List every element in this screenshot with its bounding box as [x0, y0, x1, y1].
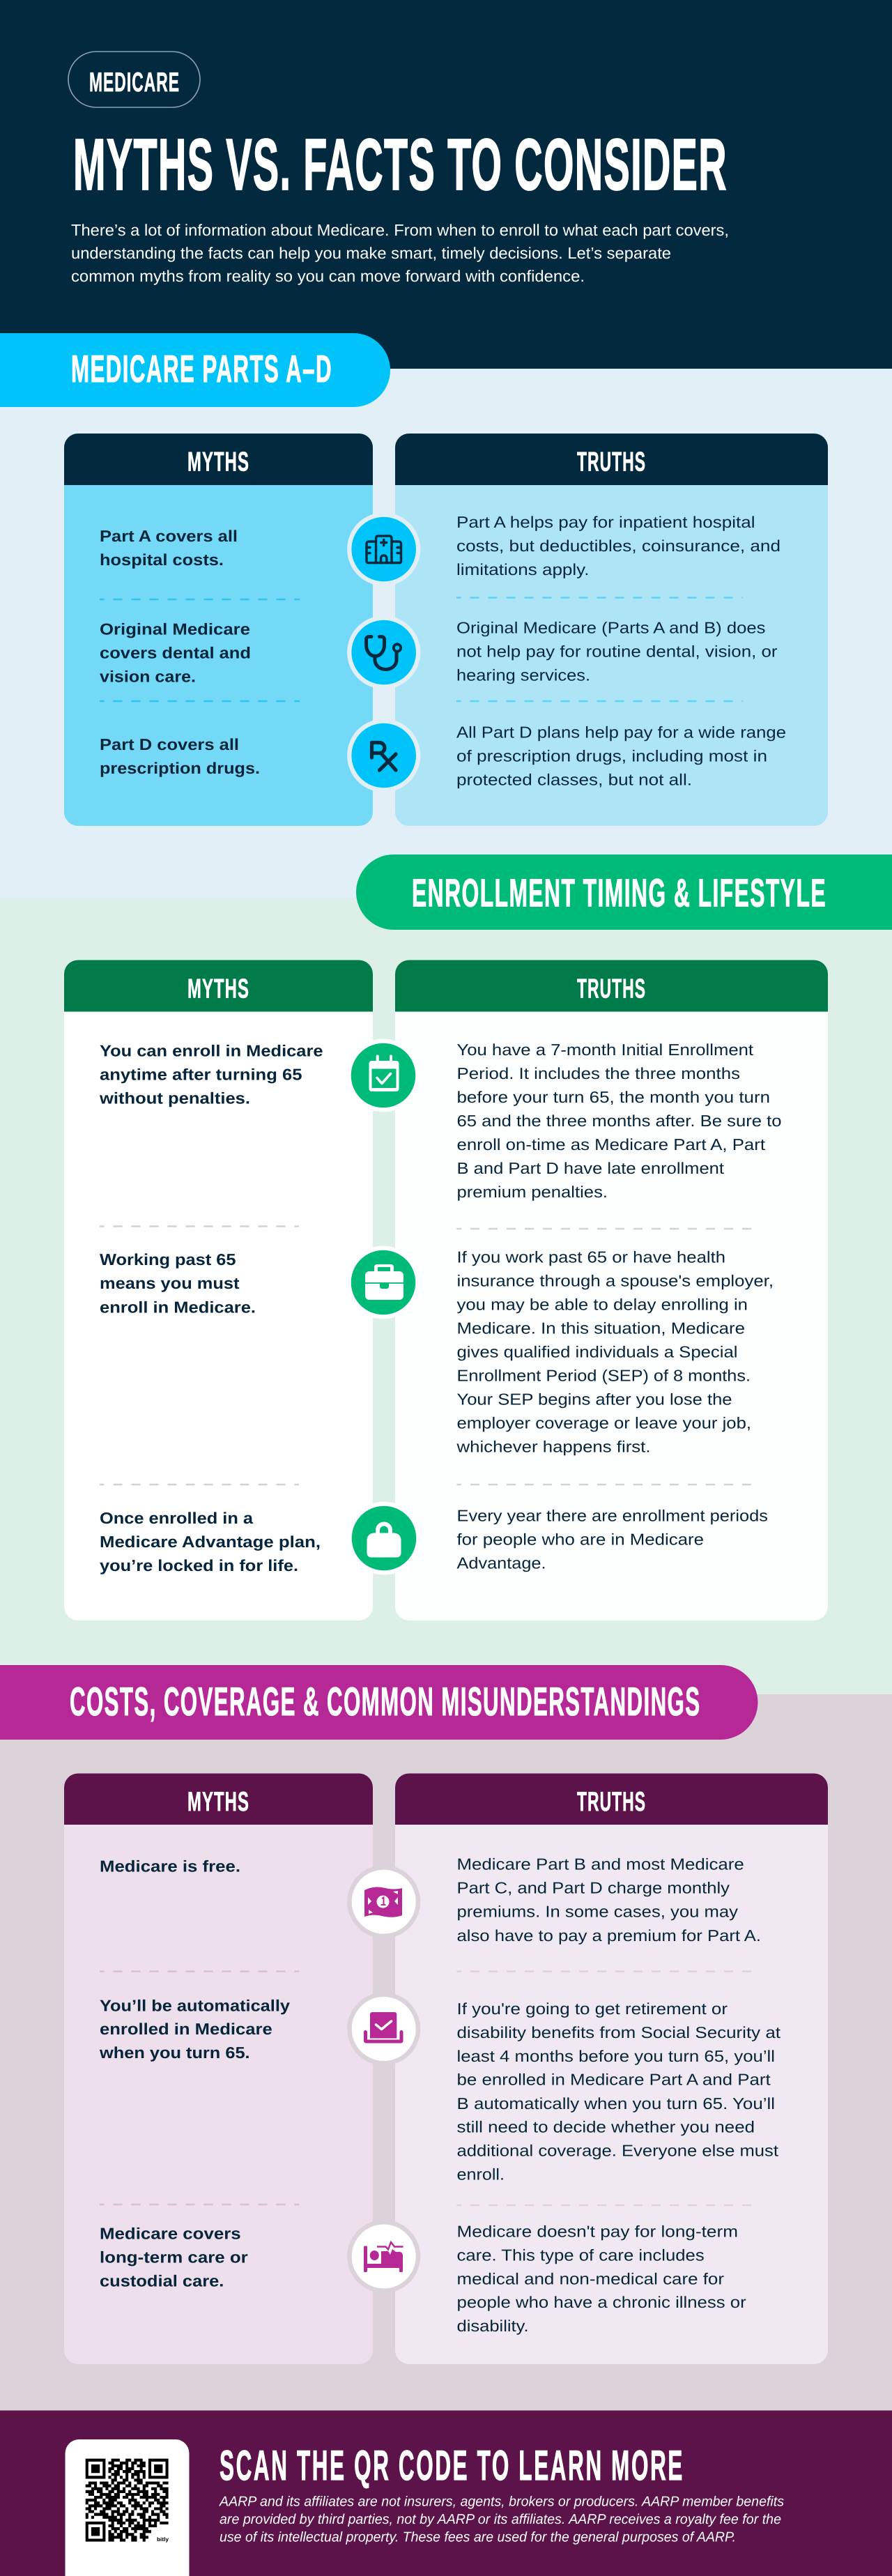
disclaimer text: AARP and its affiliates are not insurers, agents, brokers or producers. AARP member benefits [219, 2494, 784, 2509]
truth text: initial enrollment period [457, 1041, 782, 1201]
truth text: initial enrollment period: B and Part D have late enrollment [457, 1159, 725, 1177]
truths header: TRUTHS [577, 974, 646, 1004]
gutter: green divider [373, 1012, 395, 1620]
myths card: Enrollment [64, 960, 373, 1620]
truth text: Part D: All Part D plans help pay for a wide range [456, 723, 786, 742]
intro text [71, 221, 729, 285]
section tab: Costs, Coverage and Common Misunderstandings [0, 1665, 758, 1740]
truth text: initial enrollment period: 65 and the three months after. Be sure to [457, 1112, 782, 1130]
myth text: locked in [100, 1509, 321, 1574]
truth text: enrollment periods: Advantage. [457, 1554, 546, 1572]
myth text: working past 65 [100, 1250, 256, 1316]
QR code [86, 2460, 169, 2540]
truths card: Costs [395, 1773, 828, 2364]
truth text: initial enrollment period: Period. It includes the three months [457, 1064, 740, 1082]
myth text: working past 65: means you must [100, 1274, 240, 1292]
myths header [64, 960, 373, 1012]
intro text: There’s a lot of information about Medicare. From when to enroll to what each part covers, [71, 221, 729, 239]
header background [0, 0, 892, 369]
truth text: special enrollment period: Your SEP begins after you lose the [457, 1390, 732, 1408]
truth text: premiums [457, 1855, 761, 1945]
icon: hospital [347, 512, 420, 586]
myths header: MYTHS [187, 974, 249, 1004]
truth text: Part A: limitations apply. [456, 560, 590, 578]
panel: section 2 background [0, 898, 892, 1694]
truth text: automatic enrollment: disability benefits from Social Security at [457, 2023, 781, 2041]
truth text: special enrollment period: If you work past 65 or have health [457, 1248, 725, 1266]
truth text: special enrollment period [456, 1248, 774, 1455]
myth text: long-term care: Medicare covers [100, 2225, 241, 2243]
myth text: automatically enrolled: enrolled in Medicare [100, 2020, 272, 2038]
truths header [395, 1773, 828, 1825]
disclaimer text [219, 2494, 784, 2545]
truth text: premiums: Part C, and Part D charge monthly [457, 1879, 730, 1897]
myth text: Original Medicare: Original Medicare [100, 620, 250, 638]
disclaimer text: are provided by third parties, not by AARP or its affiliates. AARP receives a royalty fee for the [220, 2512, 781, 2527]
truths card: Medicare Parts [395, 434, 828, 826]
myth text: Original Medicare: covers dental and [100, 644, 251, 662]
myth text: automatically enrolled: You’ll be automatically [100, 1996, 290, 2014]
truth text: long-term care [457, 2222, 746, 2335]
myth text: Part D [100, 735, 260, 777]
truth text: automatic enrollment: be enrolled in Medicare Part A and Part [457, 2070, 771, 2088]
myth text: enroll anytime: You can enroll in Medicare [100, 1041, 323, 1059]
truth text: long-term care: people who have a chronic illness or [457, 2293, 746, 2311]
myth text: working past 65: Working past 65 [100, 1250, 236, 1268]
truth text: premiums: Medicare Part B and most Medicare [457, 1855, 744, 1873]
truth text: long-term care: Medicare doesn't pay for long-term [457, 2222, 738, 2240]
truth text: special enrollment period: insurance through a spouse's employer, [457, 1271, 774, 1289]
myth text: long-term care [100, 2225, 248, 2290]
truth text: long-term care: care. This type of care includes [457, 2246, 705, 2264]
myth text: automatically enrolled: when you turn 65. [99, 2044, 250, 2062]
truth text: enrollment periods: Every year there are enrollment periods [457, 1507, 768, 1525]
QR code card [66, 2439, 190, 2576]
panel: header [0, 0, 892, 369]
truth text: automatic enrollment: still need to decide whether you need [457, 2117, 755, 2136]
icon: stethoscope [347, 615, 420, 689]
myth text: locked in: you’re locked in for life. [100, 1556, 298, 1574]
disclaimer text: use of its intellectual property. These fees are used for the general purposes of AARP. [220, 2530, 736, 2545]
myths header [64, 1773, 373, 1825]
icon: dollar bill [347, 1865, 420, 1938]
truth text: automatic enrollment [457, 2000, 781, 2183]
myth text: Part D: Part D covers all [100, 735, 239, 753]
truth text: premiums: also have to pay a premium for Part A. [457, 1926, 761, 1945]
section tab: Medicare Parts A-D: MEDICARE PARTS A–D [71, 347, 332, 390]
myth text: Original Medicare: vision care. [100, 668, 196, 686]
truth text: Original Medicare: Original Medicare (Parts A and B) does [456, 619, 765, 637]
truth text: special enrollment period: employer coverage or leave your job, [457, 1413, 751, 1432]
icon: hospital bed with pulse [347, 2220, 420, 2293]
bitly mark: bitly [157, 2536, 169, 2543]
myth text: locked in: Once enrolled in a [100, 1509, 253, 1527]
footer background [0, 2410, 892, 2576]
truth text: enrollment periods: for people who are in Medicare [457, 1531, 704, 1549]
truth text: Part D: of prescription drugs, including most in [456, 747, 767, 765]
truth text: special enrollment period: Medicare. In this situation, Medicare [457, 1319, 745, 1337]
myth text: Medicare is free: Medicare is free. [100, 1857, 240, 1875]
truth text: special enrollment period: Enrollment Period (SEP) of 8 months. [457, 1366, 751, 1384]
myth text: enroll anytime: without penalties. [99, 1089, 250, 1107]
myth text: Original Medicare [100, 620, 251, 686]
myth text: enroll anytime: anytime after turning 65 [100, 1065, 302, 1083]
truth text: Original Medicare: hearing services. [456, 666, 590, 684]
truths header: TRUTHS [577, 447, 646, 477]
section tab: Medicare Parts A-D [0, 333, 390, 407]
badge: Medicare [68, 52, 200, 107]
myths header: MYTHS [187, 1787, 249, 1817]
truth text: long-term care: disability. [457, 2317, 529, 2335]
truth text: Part A: Part A helps pay for inpatient hospital [456, 513, 755, 531]
truth text: special enrollment period: you may be able to delay enrolling in [457, 1295, 748, 1313]
panel: section 3 background [0, 1694, 892, 2411]
icon: calendar check [347, 1038, 420, 1112]
truth text: special enrollment period: whichever happens first. [456, 1437, 651, 1455]
myths card: Costs [64, 1773, 373, 2364]
myth text: Part A [100, 527, 238, 569]
truths header: TRUTHS [577, 1787, 646, 1817]
truth text: automatic enrollment: least 4 months before you turn 65, you’ll [457, 2047, 775, 2065]
myth text: Part D: prescription drugs. [100, 759, 260, 777]
truth text: automatic enrollment: If you're going to get retirement or [457, 2000, 728, 2018]
truth text: Original Medicare: not help pay for routine dental, vision, or [456, 643, 778, 661]
section tab: Enrollment Timing and Lifestyle [356, 854, 892, 930]
myths header [64, 434, 373, 485]
truths card: Enrollment [395, 960, 828, 1620]
myth text: long-term care: long-term care or [100, 2248, 248, 2267]
truth text: Part A: costs, but deductibles, coinsurance, and [456, 537, 780, 555]
truth text: automatic enrollment: enroll. [457, 2165, 505, 2183]
icon: inbox with check [347, 1992, 420, 2066]
truth text: Part A [456, 513, 780, 578]
truth text: long-term care: medical and non-medical care for [457, 2269, 724, 2287]
panel: footer [0, 2410, 892, 2576]
truth text: premiums: premiums. In some cases, you may [457, 1903, 739, 1921]
myth text: enroll anytime [99, 1041, 323, 1107]
myth text: locked in: Medicare Advantage plan, [100, 1533, 321, 1551]
icon: briefcase [347, 1246, 420, 1319]
truths header [395, 434, 828, 485]
icon: padlock [347, 1501, 421, 1575]
truth text: automatic enrollment: additional coverage. Everyone else must [457, 2141, 779, 2159]
intro text: understanding the facts can help you make smart, timely decisions. Let’s separate [71, 244, 671, 262]
truth text: initial enrollment period: premium penalties. [457, 1183, 608, 1201]
truth text: automatic enrollment: B automatically when you turn 65. You’ll [457, 2094, 775, 2113]
truth text: Part D: protected classes, but not all. [456, 771, 692, 789]
truth text: initial enrollment period: enroll on-time as Medicare Part A, Part [457, 1135, 766, 1153]
truths header [395, 960, 828, 1012]
panel: section 1 background [0, 369, 892, 898]
badge: Medicare: MEDICARE [89, 68, 180, 98]
myths card: Medicare Parts [64, 434, 373, 826]
truth text: Part D [456, 723, 786, 789]
truth text: Original Medicare [456, 619, 778, 684]
icon: prescription Rx [347, 719, 420, 792]
myth text: long-term care: custodial care. [100, 2272, 224, 2290]
intro text: common myths from reality so you can move forward with confidence. [71, 267, 585, 285]
truth text: initial enrollment period: before your turn 65, the month you turn [457, 1088, 770, 1106]
truth text: enrollment periods [457, 1507, 768, 1572]
truth text: special enrollment period: gives qualified individuals a Special [457, 1342, 737, 1360]
myth text: Part A: Part A covers all [100, 527, 238, 545]
myth text: working past 65: enroll in Medicare. [100, 1298, 256, 1316]
truth text: initial enrollment period: You have a 7-month Initial Enrollment [457, 1041, 754, 1059]
myth text: Part A: hospital costs. [100, 551, 224, 569]
myths header: MYTHS [187, 447, 249, 477]
myth text: automatically enrolled [99, 1996, 290, 2062]
